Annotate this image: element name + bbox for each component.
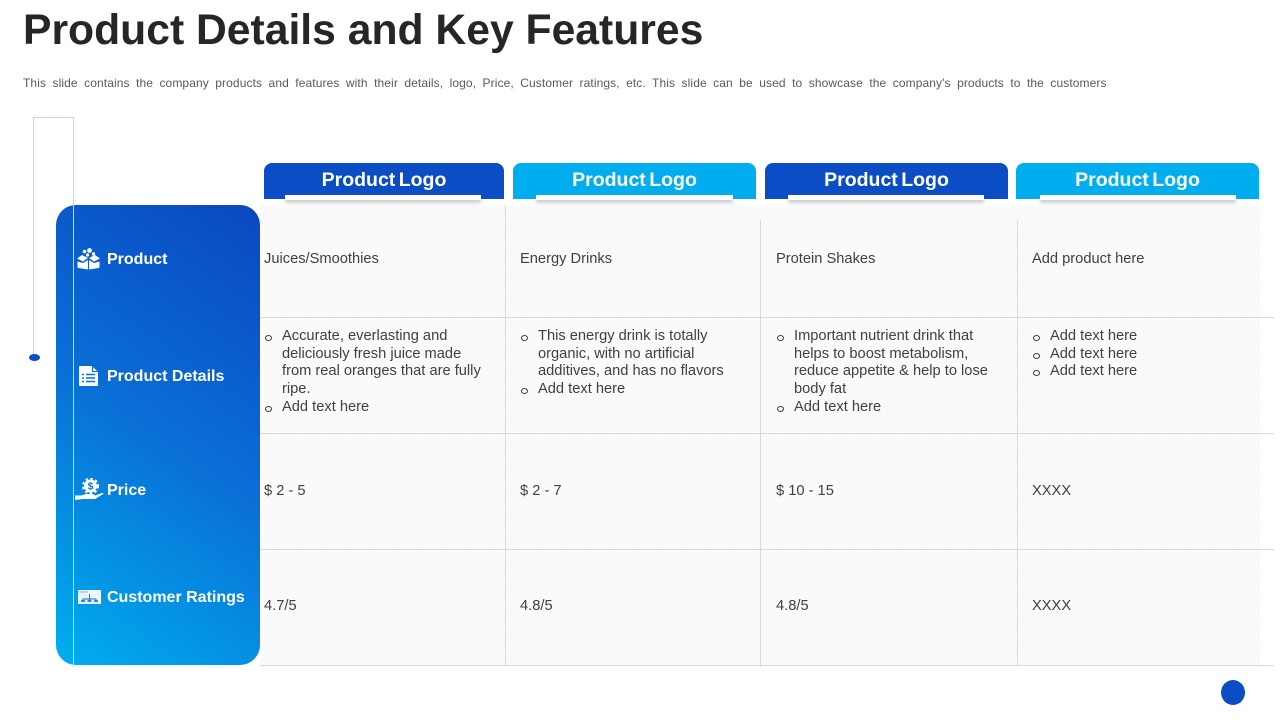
details cell 4	[1033, 328, 1137, 379]
details cell 2: Add text here	[538, 381, 625, 397]
details cell 2: organic, with no artificial	[538, 346, 694, 362]
row label: product	[77, 248, 168, 270]
product 4: Add product here	[1032, 251, 1144, 267]
rating 2: 4.8/5	[520, 598, 553, 614]
details cell 3: reduce appetite & help to lose	[794, 363, 988, 379]
rating 3: 4.8/5	[776, 598, 809, 614]
icon: hand with dollar gear: $	[88, 482, 94, 492]
price row	[264, 483, 1071, 499]
price 2: $ 2 - 7	[520, 483, 562, 499]
icon: open box	[77, 248, 100, 270]
product row	[264, 251, 1144, 267]
customer ratings row	[264, 598, 1071, 614]
details cell 3: Add text here	[794, 399, 881, 415]
icon: hand with dollar gear	[75, 478, 104, 500]
column header: product logo 4	[1016, 163, 1259, 199]
label text: Product	[107, 251, 167, 268]
page marker dot	[1221, 680, 1245, 705]
product 2: Energy Drinks	[520, 251, 612, 267]
column header: product logo 2: Product Logo	[572, 169, 697, 191]
details cell 4: Add text here	[1050, 328, 1137, 344]
row label: customer ratings	[78, 589, 245, 606]
title: Product Details and Key Features	[23, 6, 703, 54]
details cell 4: Add text here	[1050, 346, 1137, 362]
subtitle text: This slide contains the company products and features with their details, logo, Price, Customer ratings, etc. This slide can be used to showcase the company's products to the customers	[23, 76, 1107, 90]
product 3: Protein Shakes	[776, 251, 875, 267]
details cell 1: ripe.	[282, 381, 311, 397]
details cell 1: deliciously fresh juice made	[282, 346, 461, 362]
price 1: $ 2 - 5	[264, 483, 306, 499]
column header: product logo 2	[513, 163, 756, 199]
label text: Price	[107, 482, 146, 499]
column header: product logo 1	[264, 163, 504, 199]
details cell 1	[265, 328, 481, 415]
details cell 2: additives, and has no flavors	[538, 363, 724, 379]
column header: product logo 1: Product Logo	[322, 169, 446, 191]
product 1: Juices/Smoothies	[264, 251, 379, 267]
details cell 3: Important nutrient drink that	[794, 328, 973, 344]
details cell 1: Accurate, everlasting and	[282, 328, 447, 344]
details cell 3: helps to boost metabolism,	[794, 346, 968, 362]
price 3: $ 10 - 15	[776, 483, 834, 499]
icon: document	[79, 366, 98, 386]
row label: product details	[79, 366, 224, 386]
details cell 4: Add text here	[1050, 363, 1137, 379]
details cell 3	[777, 328, 988, 415]
rating 1: 4.7/5	[264, 598, 297, 614]
decorative connector with blue dot	[29, 117, 74, 667]
column header: product logo 3	[765, 163, 1008, 199]
row label: price	[75, 478, 146, 500]
details cell 1: from real oranges that are fully	[282, 363, 481, 379]
details cell 1: Add text here	[282, 399, 369, 415]
details cell 3: body fat	[794, 381, 846, 397]
price 4: XXXX	[1032, 483, 1071, 499]
icon: rating board	[78, 590, 101, 604]
panel: comparison table grid	[260, 205, 1260, 665]
column header: product logo 3: Product Logo	[824, 169, 949, 191]
details cell 2	[521, 328, 724, 397]
details cell 2: This energy drink is totally	[538, 328, 707, 344]
rating 4: XXXX	[1032, 598, 1071, 614]
column header: product logo 4: Product Logo	[1075, 169, 1200, 191]
label text: Product Details	[107, 368, 224, 385]
panel: row label sidebar	[56, 205, 260, 665]
label text: Customer Ratings	[107, 589, 245, 606]
